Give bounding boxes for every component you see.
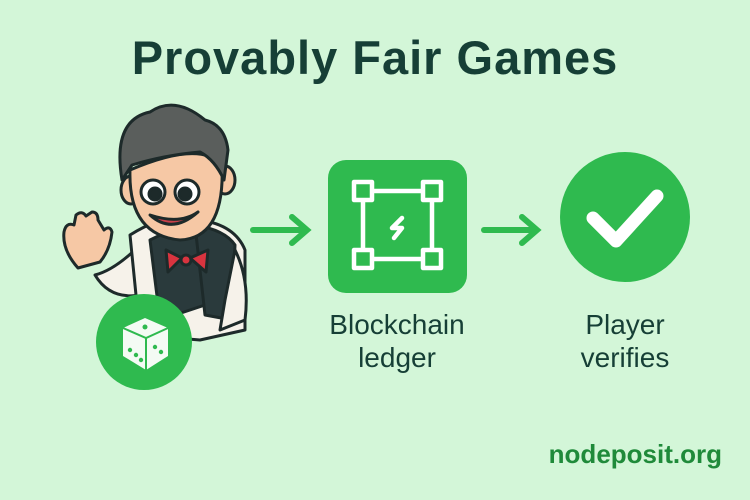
icon: blockchain box	[328, 160, 467, 293]
head	[120, 105, 235, 240]
label: blockchain ledger: Blockchain	[329, 309, 465, 340]
body: shirt	[95, 217, 246, 340]
footer: site name: nodeposit.org	[549, 439, 722, 469]
arrow 1	[253, 217, 307, 243]
label: player verifies: Player	[585, 309, 665, 340]
label: player verifies: verifies	[581, 342, 669, 373]
label: player verifies	[580, 309, 669, 373]
label: blockchain ledger: ledger	[358, 342, 436, 373]
icon: check circle	[560, 152, 690, 282]
hand	[64, 212, 112, 268]
label: blockchain ledger	[329, 309, 465, 373]
icon: dice circle	[96, 294, 192, 390]
title: Provably Fair Games	[132, 31, 618, 84]
bow tie	[166, 250, 208, 272]
arrow 2	[484, 217, 537, 243]
